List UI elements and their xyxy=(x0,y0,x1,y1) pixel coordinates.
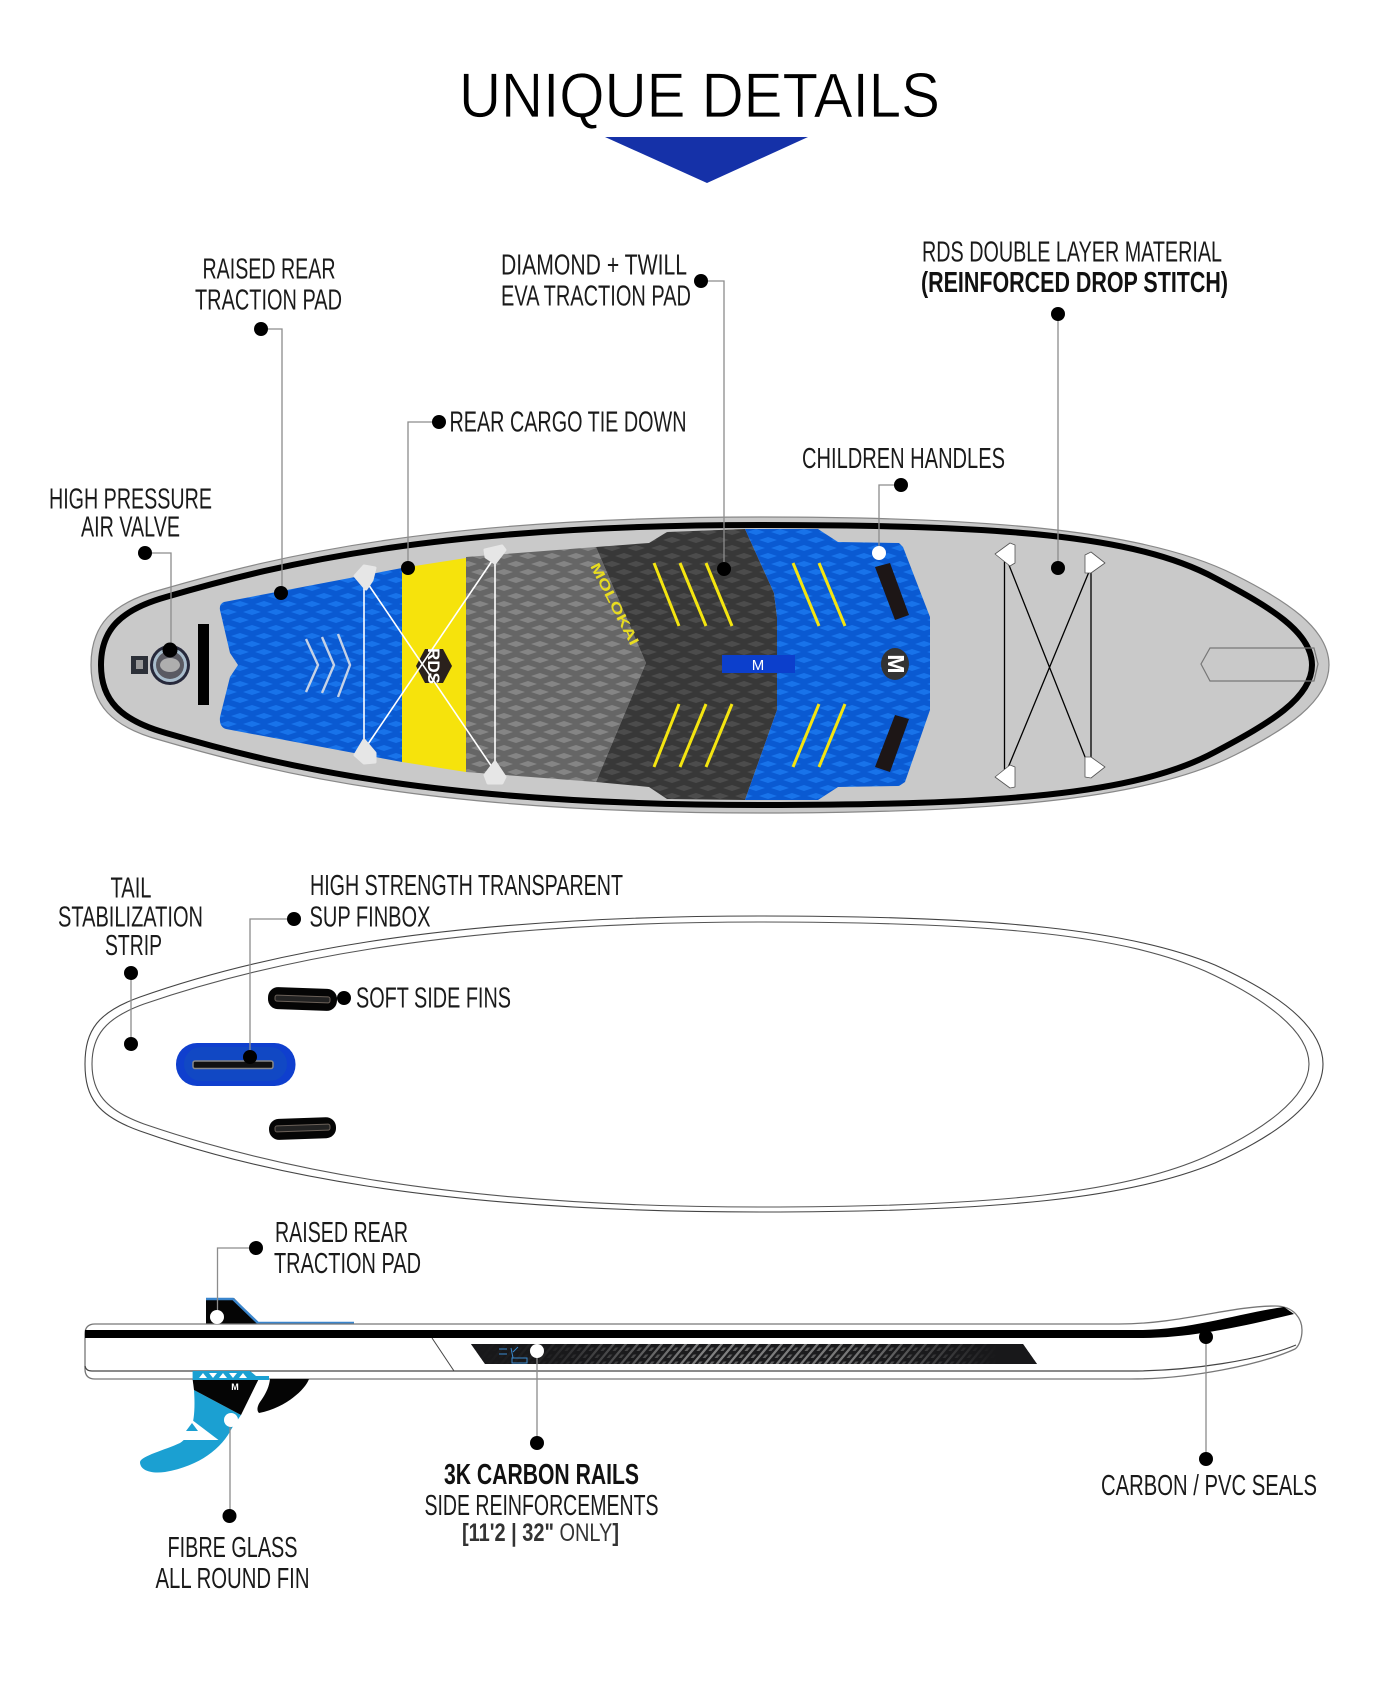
callout: high strength transparent sup finbox: SUP FINBOX xyxy=(310,902,430,934)
side fin bottom xyxy=(269,1117,336,1140)
raised rear pad xyxy=(206,1298,354,1325)
diagonal seam xyxy=(432,1338,454,1371)
dark diamond and twill pad xyxy=(596,529,777,800)
callout: rds double layer material: (REINFORCED DROP STITCH) xyxy=(921,267,1228,299)
rear blue traction pad xyxy=(220,568,402,762)
deck outer shape xyxy=(91,517,1329,813)
black rail line xyxy=(101,525,1312,805)
callout: diamond + twill eva traction pad: EVA TRACTION PAD xyxy=(501,280,691,312)
callout: diamond + twill eva traction pad xyxy=(501,250,731,576)
callout: raised rear traction pad: RAISED REAR xyxy=(202,254,336,286)
callout: soft side fins xyxy=(337,982,511,1014)
callout: high pressure air valve xyxy=(49,484,212,658)
carbon rail xyxy=(471,1344,1037,1364)
chevrons on rear pad xyxy=(306,634,350,697)
board side outline xyxy=(85,1306,1302,1379)
rear tie down rings xyxy=(355,546,505,783)
callout: 3k carbon rails: 3K CARBON RAILS xyxy=(444,1459,639,1491)
callout: fibre glass all round fin: FIBRE GLASS xyxy=(168,1532,298,1564)
callout: 3k carbon rails: [11'2 | 32" ONLY] xyxy=(462,1519,619,1547)
callout: diamond + twill eva traction pad: DIAMOND + TWILL xyxy=(501,250,687,282)
callout: children handles: CHILDREN HANDLES xyxy=(802,443,1005,475)
round badge xyxy=(881,648,909,680)
callout: high pressure air valve: HIGH PRESSURE xyxy=(49,484,212,516)
panel: bottom view of board xyxy=(85,916,1323,1212)
callout: raised rear traction pad xyxy=(195,254,342,600)
center blue label xyxy=(722,655,795,674)
callout: tail stabilization strip: STABILIZATION xyxy=(58,902,203,934)
black stripe xyxy=(85,1307,1294,1338)
callout: raised rear traction pad side: RAISED REAR xyxy=(275,1217,408,1249)
callout: fibre glass all round fin xyxy=(156,1413,310,1595)
callout: 3k carbon rails: SIDE REINFORCEMENTS xyxy=(424,1490,658,1522)
panel: top view of board deck xyxy=(91,517,1329,813)
seam line xyxy=(85,1345,1296,1371)
callout: rear cargo tie down xyxy=(401,406,686,575)
callout: raised rear traction pad: TRACTION PAD xyxy=(195,284,342,316)
callout: high strength transparent sup finbox: HIGH STRENGTH TRANSPARENT xyxy=(310,870,623,902)
front blue traction pad xyxy=(745,529,930,800)
callout: raised rear traction pad side: TRACTION PAD xyxy=(274,1248,421,1280)
air valve xyxy=(131,645,190,685)
children handles xyxy=(875,563,909,772)
molokai logo: MOLOKAI xyxy=(587,560,642,648)
round badge: M xyxy=(883,654,909,674)
callout: soft side fins: SOFT SIDE FINS xyxy=(356,982,511,1014)
title: UNIQUE DETAILS xyxy=(459,61,940,131)
RDS badge: RDS xyxy=(424,648,443,684)
callout: tail stabilization strip: TAIL xyxy=(110,872,152,904)
callout: tail stabilization strip xyxy=(58,872,203,1051)
nose patch xyxy=(1201,648,1318,681)
callout: carbon pvc seals xyxy=(1101,1330,1317,1502)
panel: side view of board xyxy=(85,1298,1302,1473)
callout: rds double layer material: RDS DOUBLE LAYER MATERIAL xyxy=(922,237,1222,269)
main fin xyxy=(140,1371,269,1473)
main fin: M xyxy=(231,1382,239,1392)
rear fin xyxy=(257,1379,309,1413)
arrow: blue down triangle xyxy=(605,137,808,183)
callout: high strength transparent sup finbox xyxy=(243,870,623,1064)
front tie down rings xyxy=(995,543,1105,788)
callout: rear cargo tie down: REAR CARGO TIE DOWN xyxy=(450,406,686,438)
rear bungee lines xyxy=(364,557,495,770)
RDS badge xyxy=(416,648,452,684)
callout: fibre glass all round fin: ALL ROUND FIN xyxy=(156,1563,310,1595)
center blue label: M xyxy=(752,657,764,674)
side fin top xyxy=(268,987,337,1011)
front bungee lines xyxy=(1004,555,1091,775)
yellow lines xyxy=(654,563,845,767)
blue finbox xyxy=(176,1043,296,1086)
yellow stripe xyxy=(402,558,466,772)
callout: rds double layer material xyxy=(921,237,1228,575)
callout: 3k carbon rails xyxy=(424,1344,658,1547)
callout: tail stabilization strip: STRIP xyxy=(105,930,162,962)
hull outlines xyxy=(85,916,1323,1212)
callout: children handles xyxy=(802,443,1005,560)
black tail bar xyxy=(198,624,209,705)
callout: raised rear traction pad side xyxy=(210,1217,421,1324)
grey traction pad xyxy=(466,547,646,782)
callout: high pressure air valve: AIR VALVE xyxy=(81,512,180,544)
